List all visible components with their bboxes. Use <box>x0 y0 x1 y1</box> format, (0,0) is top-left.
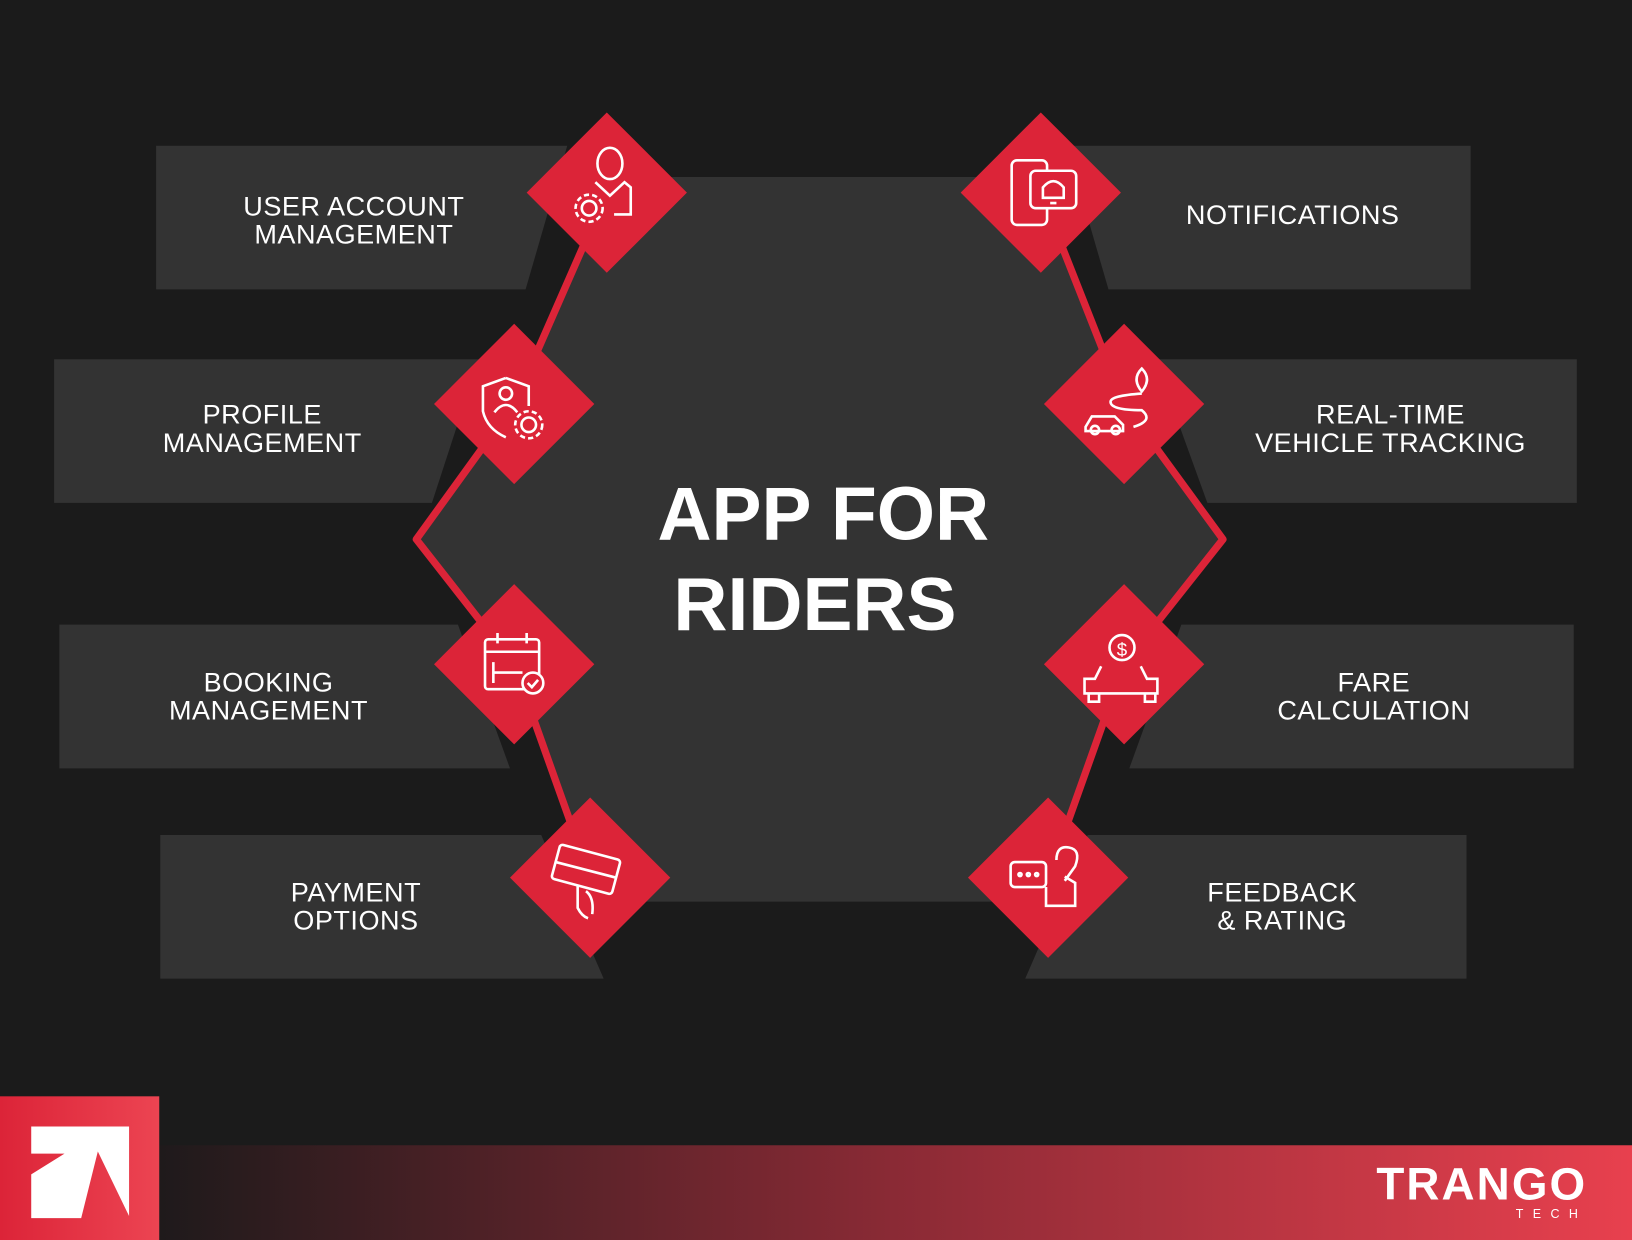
panel: payment options: PAYMENT <box>291 878 421 908</box>
panel: profile management: MANAGEMENT <box>163 428 362 458</box>
brand logo: TECH <box>1516 1207 1587 1221</box>
icon: tracking diamond <box>1044 324 1204 484</box>
panel: user account management: USER ACCOUNT <box>243 192 464 222</box>
icon: profile diamond <box>434 324 594 484</box>
panel: booking management: MANAGEMENT <box>169 695 368 725</box>
panel: real-time vehicle tracking: REAL-TIME <box>1316 400 1465 430</box>
panel: fare calculation: CALCULATION <box>1277 695 1470 725</box>
panel: notifications: NOTIFICATIONS <box>1186 200 1399 230</box>
panel: payment options <box>160 835 604 979</box>
panel: notifications <box>1067 146 1471 289</box>
panel: profile management <box>54 359 479 503</box>
logo mark square <box>0 1096 159 1240</box>
panel: fare calculation <box>1129 625 1574 768</box>
panel: fare calculation: FARE <box>1338 667 1410 697</box>
panel: feedback & rating: & RATING <box>1217 906 1347 936</box>
icon: booking diamond <box>434 584 594 744</box>
title: APP FOR <box>657 471 989 555</box>
icon: payment diamond <box>510 798 670 958</box>
brand logo: TRANGO <box>1376 1158 1587 1209</box>
panel: feedback & rating: FEEDBACK <box>1207 878 1357 908</box>
title: RIDERS <box>673 562 957 646</box>
icon: fare diamond: $ <box>1117 639 1128 660</box>
panel: payment options: OPTIONS <box>293 906 419 936</box>
panel: feedback & rating <box>1025 835 1467 979</box>
central hexagon <box>416 177 1224 902</box>
panel: user account management <box>156 146 567 289</box>
panel: user account management: MANAGEMENT <box>254 220 453 250</box>
panel: profile management: PROFILE <box>203 400 322 430</box>
icon: user account diamond <box>527 112 687 273</box>
icon: fare diamond <box>1044 584 1204 744</box>
icon: feedback diamond <box>968 798 1128 958</box>
icon: notifications diamond <box>961 112 1121 273</box>
panel: real-time vehicle tracking: VEHICLE TRACKING <box>1255 428 1526 458</box>
panel: booking management: BOOKING <box>204 667 333 697</box>
panel: booking management <box>59 625 510 768</box>
panel: real-time vehicle tracking <box>1155 359 1577 503</box>
red connector lines <box>416 193 1223 878</box>
title <box>657 471 989 646</box>
